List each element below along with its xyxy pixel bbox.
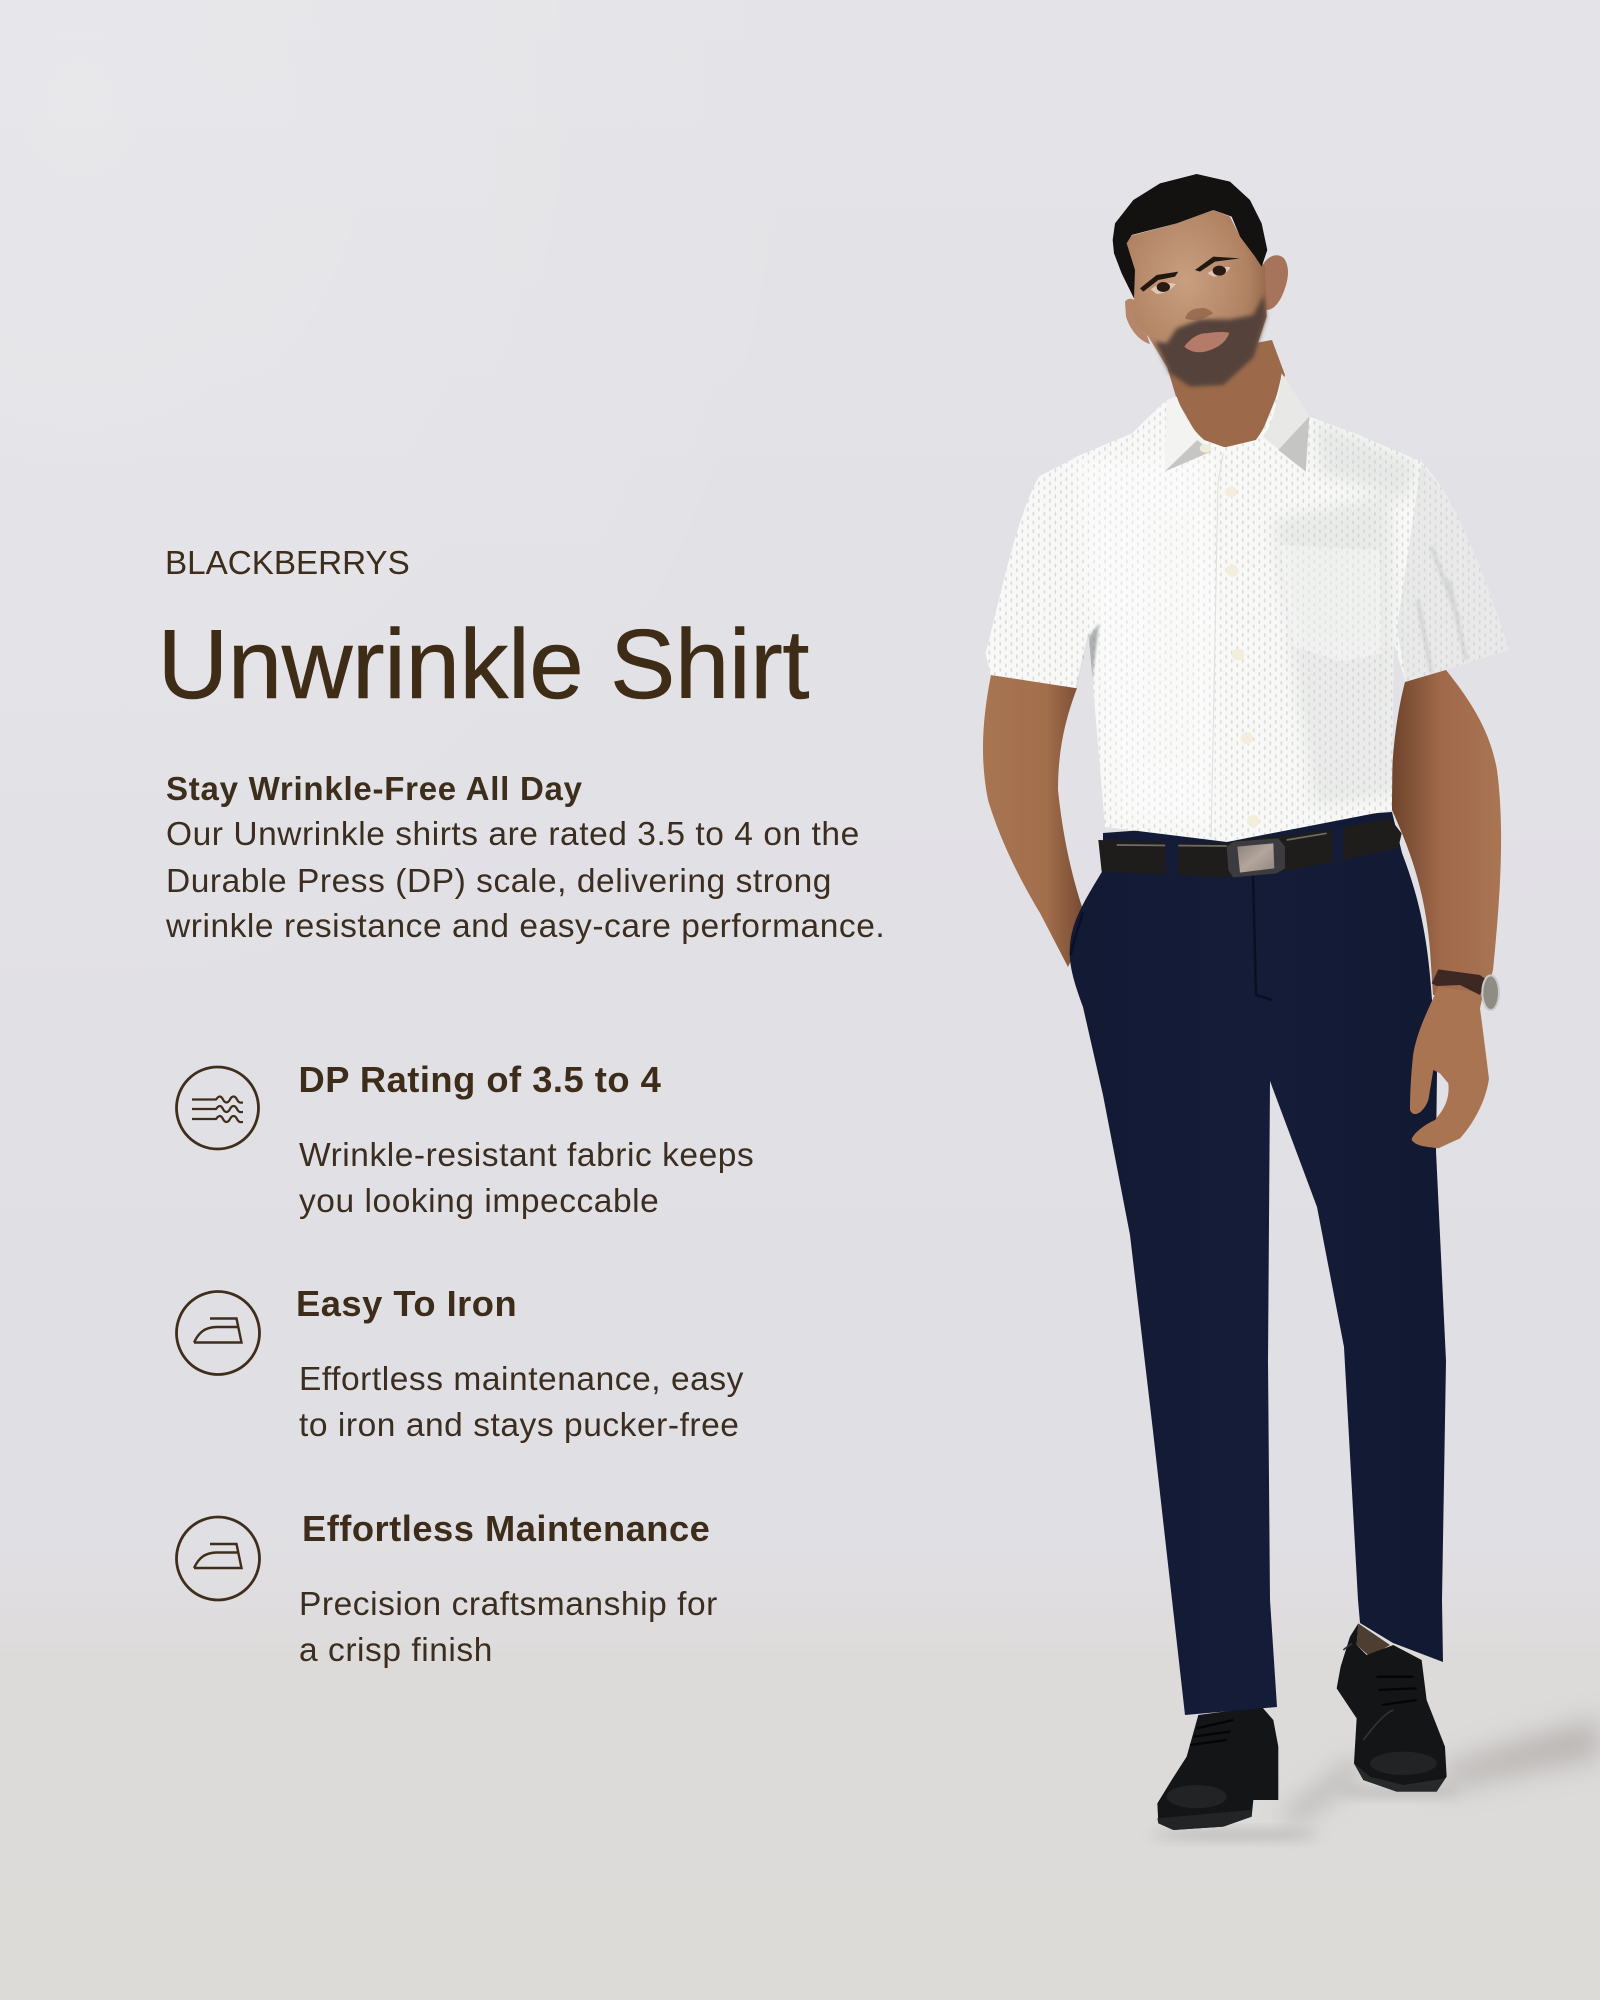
watch [1432, 969, 1499, 1010]
intro text block [166, 770, 885, 944]
icon: fabric waves in circle [175, 1066, 260, 1150]
trousers [1070, 812, 1446, 1715]
feature: effortless maintenance: a crisp finish [299, 1632, 493, 1669]
feature: easy to iron [175, 1283, 744, 1444]
brand name: BLACKBERRYS [165, 545, 410, 582]
intro text block: Durable Press (DP) scale, delivering strong [166, 862, 832, 900]
feature: effortless maintenance: Precision craftsmanship for [299, 1586, 718, 1623]
icon: iron in circle [175, 1516, 261, 1602]
feature: easy to iron: Easy To Iron [296, 1283, 517, 1324]
feature: DP rating: you looking impeccable [299, 1183, 659, 1220]
shirt [985, 373, 1509, 842]
feature: easy to iron: Effortless maintenance, easy [299, 1361, 744, 1398]
intro text block: Stay Wrinkle-Free All Day [166, 770, 583, 807]
head [1113, 174, 1288, 387]
intro text block: wrinkle resistance and easy-care performance. [166, 908, 885, 944]
model photo: man in white shirt and navy trousers [983, 174, 1600, 1844]
feature: effortless maintenance: Effortless Maintenance [302, 1508, 710, 1549]
hand [1410, 987, 1489, 1148]
arm, right [1392, 670, 1501, 1000]
floor shadows [1150, 1718, 1600, 1839]
belt with buckle [1098, 818, 1402, 882]
icon: iron in circle [175, 1290, 261, 1376]
arm, left [983, 675, 1090, 967]
intro text block: Our Unwrinkle shirts are rated 3.5 to 4 on the [166, 816, 860, 852]
feature: DP rating [175, 1059, 754, 1220]
shoes [1157, 1623, 1447, 1830]
feature: DP rating: DP Rating of 3.5 to 4 [298, 1059, 661, 1100]
neck [1165, 340, 1285, 447]
title: Unwrinkle Shirt [158, 609, 809, 719]
feature: DP rating: Wrinkle-resistant fabric keeps [299, 1137, 754, 1174]
feature: easy to iron: to iron and stays pucker-free [299, 1407, 740, 1444]
feature: effortless maintenance [175, 1508, 718, 1669]
